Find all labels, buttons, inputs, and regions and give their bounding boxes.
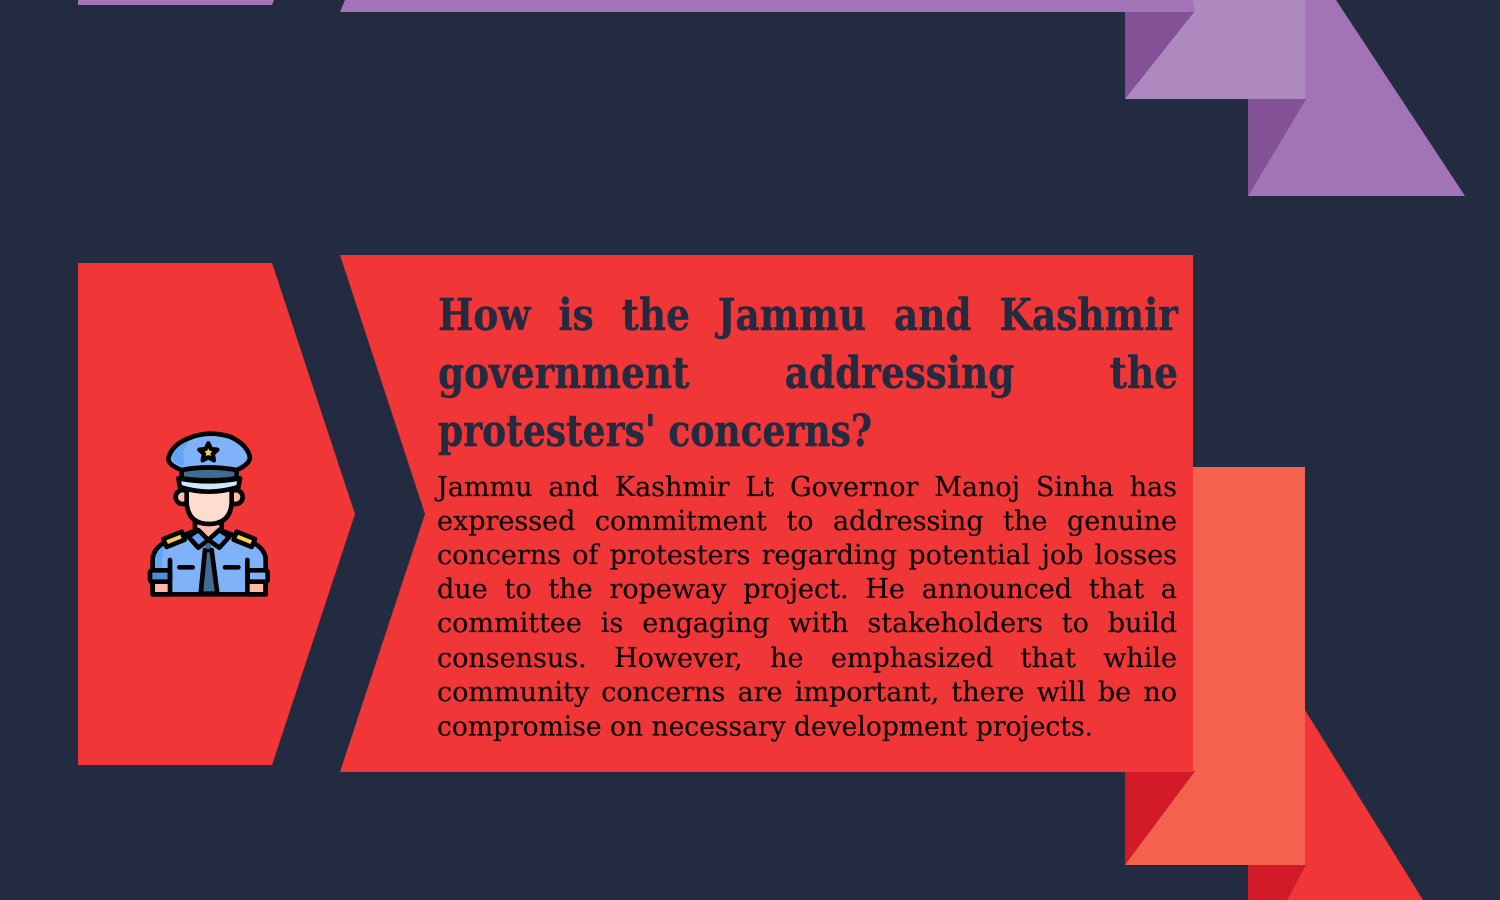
- ribbon front fold: [1125, 467, 1305, 865]
- body paragraph: [434, 472, 1177, 708]
- tie: [201, 543, 217, 594]
- purple folded ribbon: [1125, 0, 1465, 196]
- body paragraph: concerns of protesters regarding potential job losses: [437, 540, 1177, 571]
- hat crown shading: [171, 441, 189, 466]
- pockets: [179, 560, 238, 574]
- body paragraph: committee is engaging with stakeholders to build: [437, 608, 1177, 639]
- ears: [176, 490, 243, 504]
- body paragraph: expressed commitment to addressing the genuine: [437, 506, 1177, 537]
- panel: purple top banner: [340, 0, 1200, 12]
- face: [187, 488, 232, 524]
- body paragraph: due to the ropeway project. He announced that a: [437, 574, 1177, 605]
- hands and cuffs: [150, 560, 268, 594]
- icon: police officer: [150, 434, 268, 594]
- body paragraph last line: compromise on necessary development projects.: [437, 712, 1093, 743]
- red folded ribbon: [1125, 710, 1423, 900]
- panel: icon chevron: [78, 263, 355, 765]
- hat visor: [178, 478, 240, 492]
- collar: [188, 530, 229, 548]
- body paragraph: Jammu and Kashmir Lt Governor Manoj Sinha has: [437, 472, 1177, 503]
- heading: [438, 290, 1178, 398]
- panel: main text banner: [340, 255, 1193, 772]
- epaulets: [163, 532, 255, 547]
- panel: purple chevron remnant: [78, 0, 274, 5]
- body paragraph: consensus. However, he emphasized that while: [437, 643, 1177, 674]
- hat band: [182, 467, 237, 480]
- heading: government addressing the: [438, 348, 1178, 398]
- neck: [195, 518, 222, 541]
- heading: How is the Jammu and Kashmir: [438, 290, 1178, 341]
- officer shirt: [153, 530, 266, 594]
- body paragraph: community concerns are important, there will be no: [437, 677, 1177, 708]
- hat crown: [168, 434, 250, 470]
- hat star: [199, 443, 217, 460]
- heading last line: protesters' concerns?: [438, 406, 872, 457]
- shirt shading: [155, 544, 167, 568]
